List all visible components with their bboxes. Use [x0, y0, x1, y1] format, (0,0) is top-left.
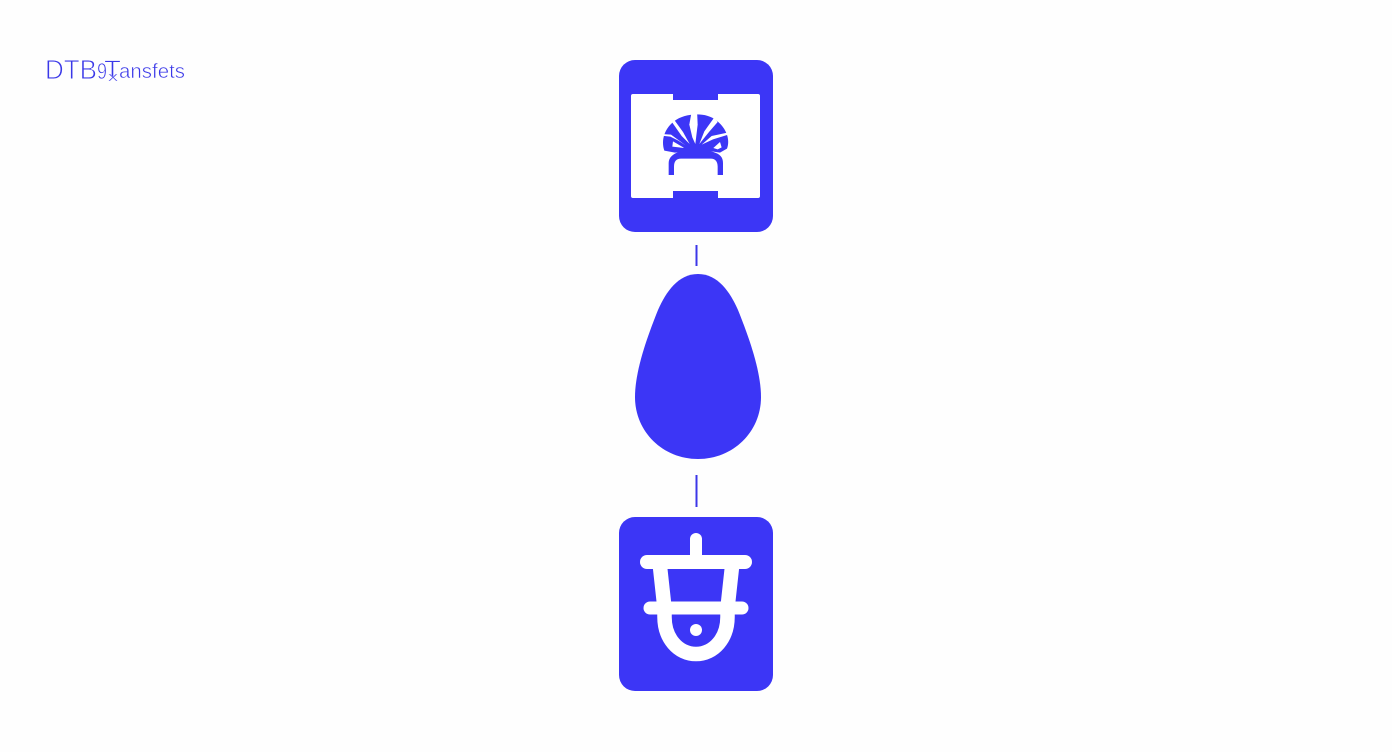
title: logo wordmark — [45, 54, 185, 85]
title: logo wordmark: 9 — [97, 58, 107, 84]
title: logo wordmark: X — [108, 73, 118, 84]
connector: upper line — [696, 245, 698, 266]
icon: plug-cup glyph — [647, 539, 745, 654]
icon: bottom card with plug-cup glyph — [619, 517, 773, 691]
title: logo wordmark: T — [104, 56, 121, 83]
icon: fan emblem — [661, 110, 730, 175]
icon: central drop shape — [635, 274, 761, 459]
title: logo wordmark: DTB — [45, 54, 97, 85]
icon: top card with fan emblem — [619, 60, 773, 232]
connector: lower line — [696, 475, 698, 507]
title: logo wordmark: ansfets — [119, 61, 185, 83]
